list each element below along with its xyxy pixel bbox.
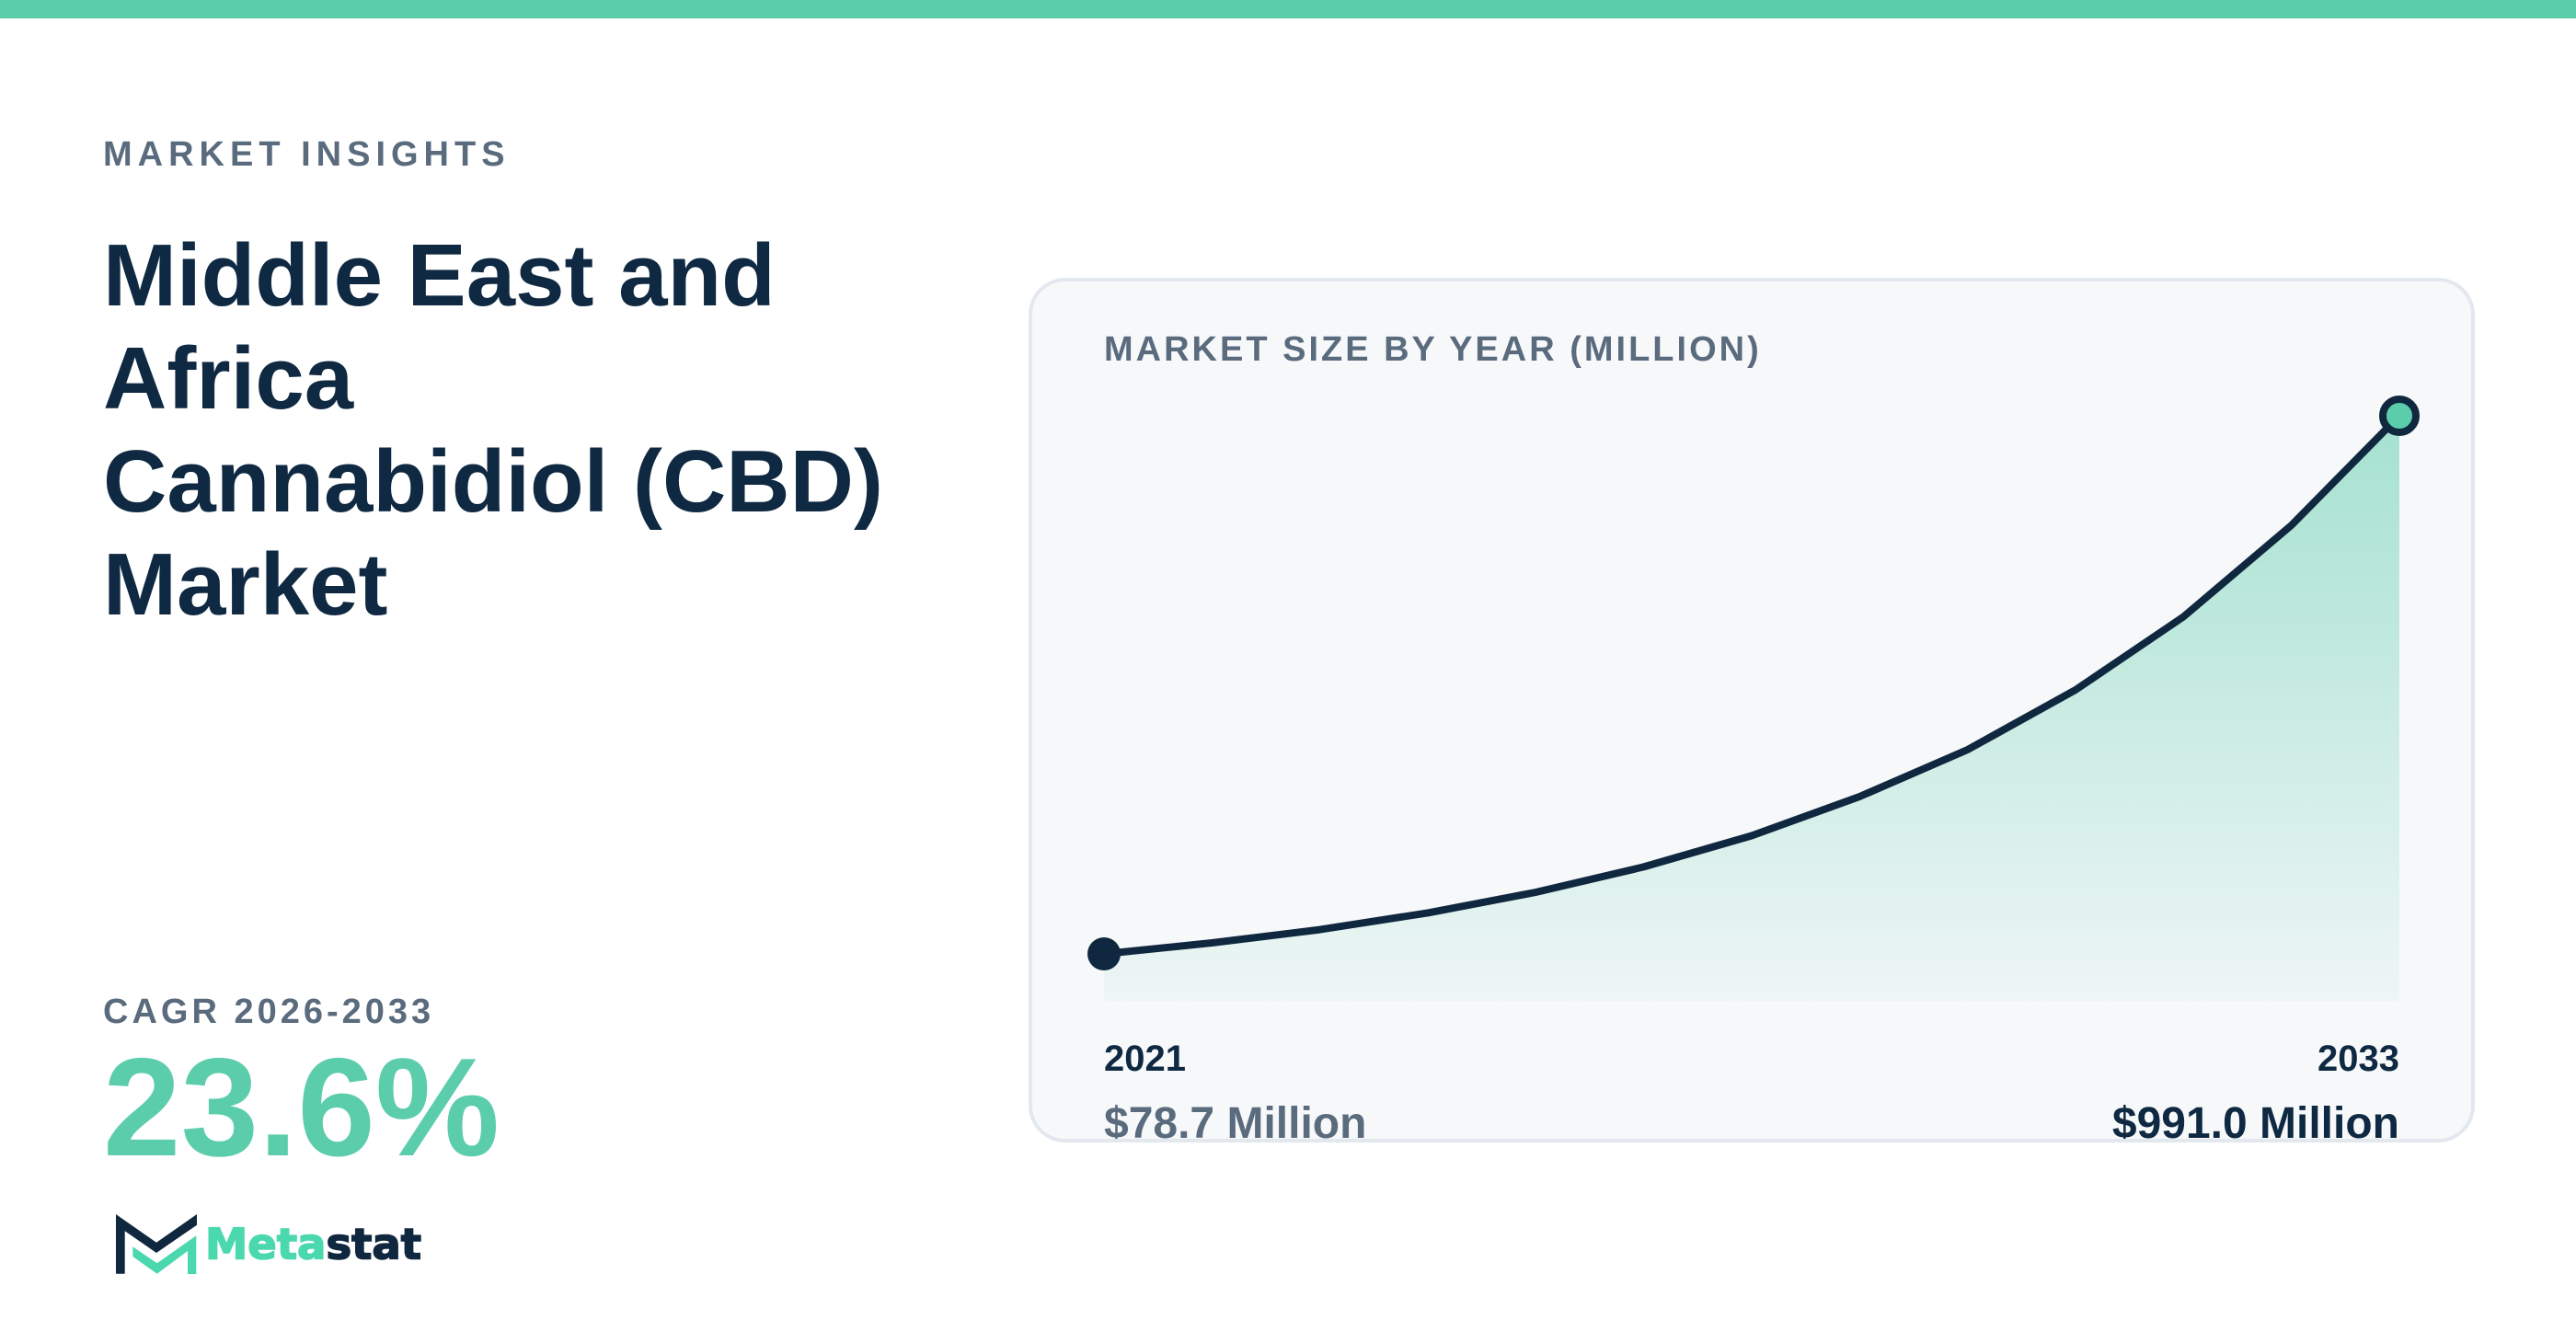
logo mark: green chevron (132, 1235, 196, 1274)
start point marker (1087, 937, 1121, 970)
title (103, 226, 883, 634)
end point marker (2383, 399, 2416, 432)
title: Africa (103, 329, 353, 428)
logo mark: dark M (116, 1214, 197, 1274)
top accent bar (0, 0, 2576, 18)
CAGR label: CAGR 2026-2033 (103, 993, 434, 1031)
eyebrow label: market insights: MARKET INSIGHTS (103, 135, 511, 174)
trend line (1104, 416, 2399, 954)
panel heading: MARKET SIZE BY YEAR (MILLION) (1104, 330, 1762, 369)
panel: market size chart card (1029, 278, 2475, 1142)
start year label: 2021 (1104, 1039, 1186, 1079)
line chart (1087, 396, 2420, 1001)
logo wordmark: Metastat (205, 1220, 421, 1269)
logo: Metastat (116, 1214, 421, 1274)
title: Cannabidiol (CBD) (103, 432, 883, 531)
end year label: 2033 (2317, 1039, 2399, 1079)
area under curve (1104, 416, 2399, 1001)
title: Middle East and (103, 226, 776, 325)
title: Market (103, 535, 387, 634)
CAGR value: 23.6% (103, 1029, 500, 1186)
